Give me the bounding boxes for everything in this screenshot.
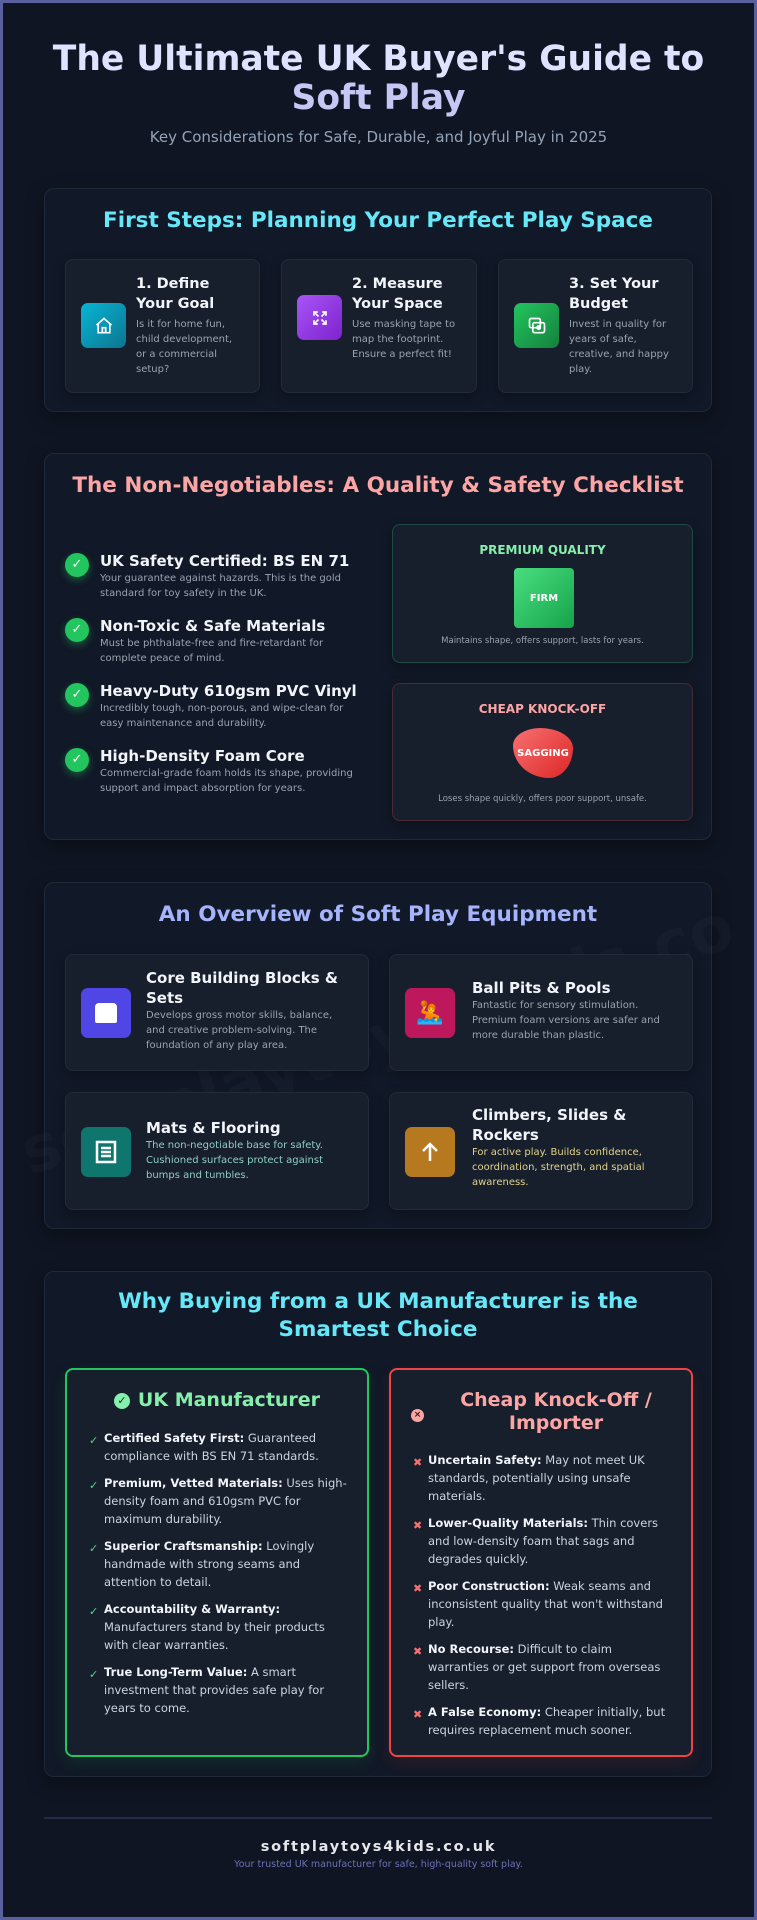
item: PVC: Incredibly tough, non-porous, and wipe-clean for easy maintenance and durability. xyxy=(100,703,343,729)
card: cheap knock-off: Loses shape quickly, offers poor support, unsafe. xyxy=(438,794,647,804)
list: risks: ✖ xyxy=(413,1645,422,1658)
list: benefits: Accountability & Warranty: Manufacturers stand by their products with clear warranties. xyxy=(104,1602,325,1652)
panel: first steps xyxy=(44,188,712,412)
item: non-toxic: Must be phthalate-free and fire-retardant for complete peace of mind. xyxy=(100,638,323,664)
card: budget: Invest in quality for years of safe, creative, and happy play. xyxy=(569,319,669,375)
item: PVC: ✓ xyxy=(72,687,82,702)
text: budget xyxy=(569,276,659,312)
heading: why UK: Smartest Choice xyxy=(278,1317,477,1342)
icon: firm block xyxy=(514,568,574,628)
text: budget: 3. Set Your xyxy=(569,276,659,292)
icon: x circle: × xyxy=(414,1410,421,1420)
card: define goal xyxy=(65,259,260,393)
list: benefits: ✓ xyxy=(89,1479,98,1492)
list: risks: Poor Construction: Weak seams and inconsistent quality that won't withstand play. xyxy=(428,1579,663,1629)
card: UK manufacturer xyxy=(65,1368,369,1757)
item: foam core: ✓ xyxy=(72,752,82,767)
item: non-toxic xyxy=(62,617,325,664)
card: blocks: Sets xyxy=(146,989,183,1007)
item: non-toxic: ✓ xyxy=(72,622,82,637)
list: risks: Lower-Quality Materials: Thin covers and low-density foam that sags and degrades quickly. xyxy=(428,1516,658,1566)
list: risks: No Recourse: Difficult to claim warranties or get support from overseas sellers. xyxy=(428,1642,660,1692)
list: benefits: ✓ xyxy=(89,1668,98,1681)
watermark: softplaytoys4kids.co xyxy=(12,890,743,1190)
item: PVC xyxy=(62,682,357,729)
card: premium quality: PREMIUM QUALITY xyxy=(479,543,606,557)
list: risks: ✖ xyxy=(413,1456,422,1469)
card title xyxy=(460,1389,652,1434)
list: benefits: ✓ xyxy=(89,1434,98,1447)
list: benefits: Premium, Vetted Materials: Uses high-density foam and 610gsm PVC for maximum durability. xyxy=(104,1476,347,1526)
heading: why UK: Why Buying from a UK Manufacturer is the xyxy=(118,1289,638,1314)
card: premium quality xyxy=(392,524,693,663)
list: benefits: True Long-Term Value: A smart investment that provides safe play for years to come. xyxy=(104,1665,324,1715)
card title: Cheap Knock-Off / xyxy=(460,1389,652,1411)
heading: checklist: The Non-Negotiables: A Quality & Safety Checklist xyxy=(72,473,684,498)
item: BS EN 71: Your guarantee against hazards. This is the gold standard for toy safety in the UK. xyxy=(100,573,341,599)
icon: sagging blob xyxy=(513,728,573,778)
item: BS EN 71 xyxy=(62,552,349,599)
card: mats: Mats & Flooring xyxy=(146,1119,281,1137)
card: ball pits xyxy=(389,954,693,1071)
card title: UK Manufacturer xyxy=(138,1389,320,1411)
card: climbers: For active play. Builds confidence, coordination, strength, and spatial awareness. xyxy=(472,1147,645,1188)
title: Soft Play xyxy=(292,78,465,118)
text: measure: Your Space xyxy=(352,296,443,312)
title: The Ultimate UK Buyer's Guide to xyxy=(53,39,704,79)
panel: equipment overview xyxy=(44,882,712,1229)
list: risks: Uncertain Safety: May not meet UK standards, potentially using unsafe materials. xyxy=(428,1453,645,1503)
icon: arrow up xyxy=(405,1127,455,1177)
item: BS EN 71: ✓ xyxy=(72,557,82,572)
card: blocks: Core Building Blocks & xyxy=(146,969,338,987)
card: premium quality: Maintains shape, offers support, lasts for years. xyxy=(441,636,644,646)
icon: mat xyxy=(81,1127,131,1177)
list: benefits: ✓ xyxy=(89,1542,98,1555)
text: define goal: 1. Define xyxy=(136,276,209,292)
footer xyxy=(234,1839,523,1870)
item: foam core: High-Density Foam Core xyxy=(100,747,305,765)
icon: block xyxy=(81,988,131,1038)
card: climbers xyxy=(389,1092,693,1210)
list: benefits: Certified Safety First: Guaranteed compliance with BS EN 71 standards. xyxy=(104,1431,319,1463)
icon: sagging blob: SAGGING xyxy=(517,748,569,758)
card: cheap knock-off xyxy=(392,683,693,821)
list: benefits: ✓ xyxy=(89,1605,98,1618)
list: risks: ✖ xyxy=(413,1519,422,1532)
list: risks: A False Economy: Cheaper initially, but requires replacement much sooner. xyxy=(428,1705,665,1737)
heading: first steps: First Steps: Planning Your Perfect Play Space xyxy=(103,208,653,233)
item: BS EN 71: UK Safety Certified: BS EN 71 xyxy=(100,552,349,570)
card: measure space: Use masking tape to map the footprint. Ensure a perfect fit! xyxy=(352,319,455,360)
card: mats: The non-negotiable base for safety. Cushioned surfaces protect against bumps and tumbles. xyxy=(146,1140,323,1181)
icon: firm block: FIRM xyxy=(530,592,558,604)
item: foam core xyxy=(62,747,353,794)
list: risks: ✖ xyxy=(413,1708,422,1721)
list: risks xyxy=(413,1453,665,1737)
card: climbers: Rockers xyxy=(472,1126,539,1144)
text: define goal xyxy=(136,276,214,312)
heading: why UK xyxy=(118,1289,638,1342)
card: ball pits: Ball Pits & Pools xyxy=(472,979,610,997)
card: blocks: Develops gross motor skills, balance, and creative problem-solving. The foundation of any play area. xyxy=(146,1010,332,1051)
title xyxy=(52,39,704,118)
card: measure space xyxy=(281,259,477,393)
list: benefits xyxy=(89,1431,347,1715)
icon: expand xyxy=(297,295,342,340)
text: define goal: Your Goal xyxy=(136,296,214,312)
list: benefits: Superior Craftsmanship: Lovingly handmade with strong seams and attention to detail. xyxy=(104,1539,314,1589)
icon: ball pit xyxy=(405,988,455,1038)
card: define goal: Is it for home fun, child development, or a commercial setup? xyxy=(136,319,232,375)
item: non-toxic: Non-Toxic & Safe Materials xyxy=(100,617,325,635)
card: cheap knock-off: CHEAP KNOCK-OFF xyxy=(479,702,606,716)
icon: x circle xyxy=(411,1409,424,1422)
panel: UK manufacturer comparison xyxy=(44,1271,712,1777)
icon: money xyxy=(514,303,559,348)
panel: checklist xyxy=(44,453,712,840)
icon: house xyxy=(81,303,126,348)
card: budget xyxy=(498,259,693,393)
item: PVC: Heavy-Duty 610gsm PVC Vinyl xyxy=(100,682,357,700)
footer: Your trusted UK manufacturer for safe, high-quality soft play. xyxy=(234,1859,523,1870)
card: cheap knock-off importer xyxy=(389,1368,693,1757)
card: climbers: Climbers, Slides & xyxy=(472,1106,626,1124)
list: risks: ✖ xyxy=(413,1582,422,1595)
text: measure xyxy=(352,276,443,312)
text: measure: 2. Measure xyxy=(352,276,443,292)
card title: Importer xyxy=(509,1412,603,1434)
icon: ball pit: 🤽 xyxy=(416,1000,444,1026)
card: ball pits: Fantastic for sensory stimulation. Premium foam versions are safer and more durable than plastic. xyxy=(472,1000,660,1041)
heading: overview: An Overview of Soft Play Equipment xyxy=(159,902,597,927)
card: mats xyxy=(65,1092,369,1210)
subtitle: Key Considerations for Safe, Durable, and Joyful Play in 2025 xyxy=(150,128,607,146)
footer: softplaytoys4kids.co.uk xyxy=(261,1839,496,1855)
item: foam core: Commercial-grade foam holds its shape, providing support and impact absorption for years. xyxy=(100,768,353,794)
card title: ✓ xyxy=(117,1394,127,1407)
text: budget: Budget xyxy=(569,296,628,312)
card: blocks xyxy=(65,954,369,1071)
